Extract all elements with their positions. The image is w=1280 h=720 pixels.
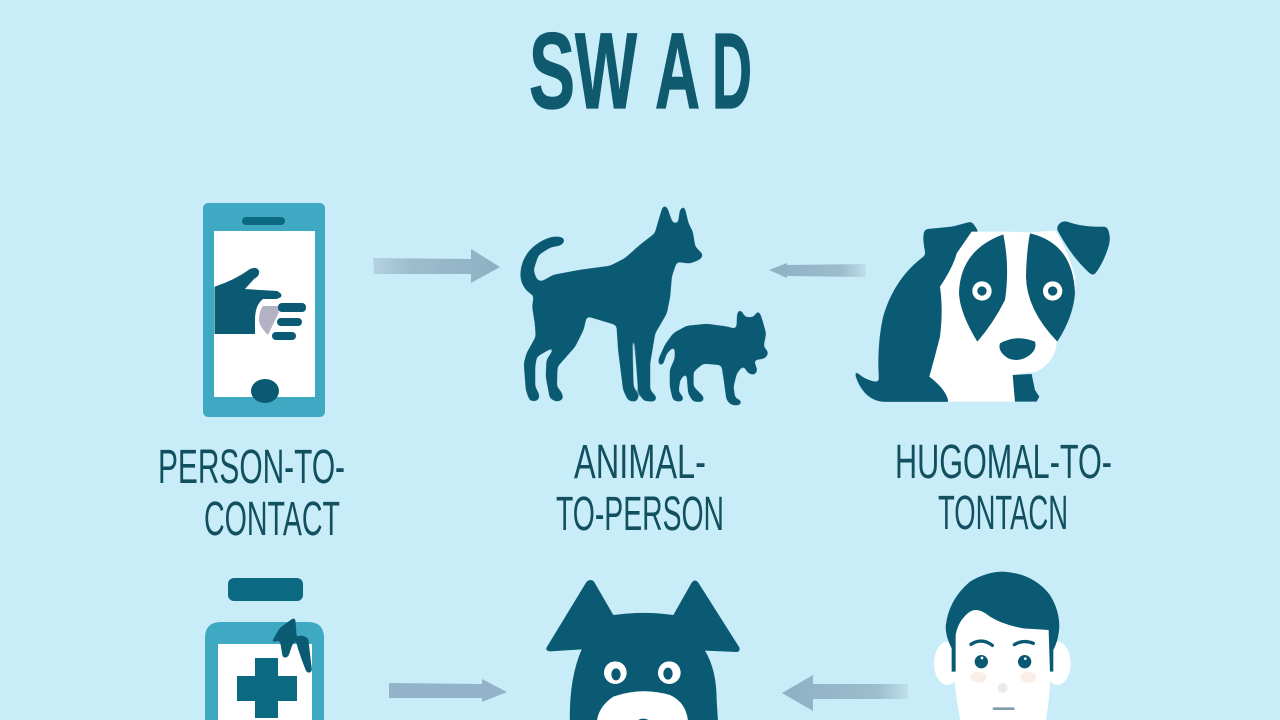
icon: person face [934,572,1071,720]
icon: medicine bottle [205,578,324,720]
muzzle [597,691,688,720]
hair [946,572,1059,672]
label: hugomal-to-tontacn [895,436,1112,540]
icon: phone with hand [203,203,325,417]
icon: spotted dog [853,221,1110,402]
arrow: phone to dogs [373,249,500,283]
eyes [972,281,1062,301]
label: person-to-contact: CONTACT [204,493,340,546]
nose [998,683,1008,693]
icon: dog face [546,580,740,720]
nose [636,719,651,720]
cheeks [970,672,1036,683]
label: hugomal-to-tontacn: HUGOMAL-TO- [895,436,1112,489]
large dog [521,205,703,402]
title: A [655,10,700,131]
label: person-to-contact: PERSON-TO- [158,441,345,494]
title: S [529,10,575,131]
title: W [575,10,637,131]
brows [971,641,1033,645]
arrow: bottle to dog [389,679,507,702]
label: animal-to-person: ANIMAL- [574,436,706,489]
mouth [993,707,1015,710]
dog body [853,222,990,402]
eyes [975,655,1031,668]
label: hugomal-to-tontacn: TONTACN [938,487,1068,540]
dog ear [1057,221,1110,276]
arrow: spotted dog to dogs [769,263,866,278]
small dog [658,308,769,405]
face [955,610,1050,720]
head and ears [546,580,740,720]
nose [999,338,1035,360]
title [529,10,752,131]
label: animal-to-person: TO-PERSON [556,488,724,541]
dog front leg [1013,374,1039,402]
label: animal-to-person [556,436,724,541]
eye patches [959,233,1075,342]
label: person-to-contact [158,441,345,546]
ears [934,642,1071,685]
arrow: person to dog [782,675,908,711]
title: D [712,10,752,131]
dog head [929,231,1075,402]
eyes [604,661,681,684]
icon: large and small dog [521,205,769,405]
